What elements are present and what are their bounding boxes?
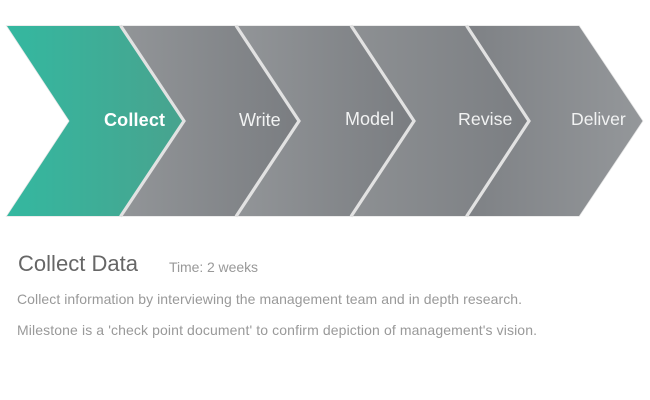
time label: Time: 2 weeks xyxy=(169,259,258,275)
description line 1: Collect information by interviewing the management team and in depth research. xyxy=(17,291,522,307)
description line 2: Milestone is a 'check point document' to confirm depiction of management's vision. xyxy=(17,322,537,338)
chevron: Write xyxy=(120,26,299,216)
chevron: Model: Model xyxy=(345,109,394,129)
chevron: Collect (active) xyxy=(7,26,184,216)
chevron: Write: Write xyxy=(239,110,281,130)
chevron: Revise: Revise xyxy=(458,109,512,129)
chevron: Deliver xyxy=(466,26,642,216)
chevron: Revise xyxy=(351,26,530,216)
chevron: Collect (active): Collect xyxy=(104,110,165,130)
heading: Collect Data: Collect Data xyxy=(18,251,139,276)
chevron: Model xyxy=(236,26,414,216)
chevron: Deliver: Deliver xyxy=(571,109,626,129)
